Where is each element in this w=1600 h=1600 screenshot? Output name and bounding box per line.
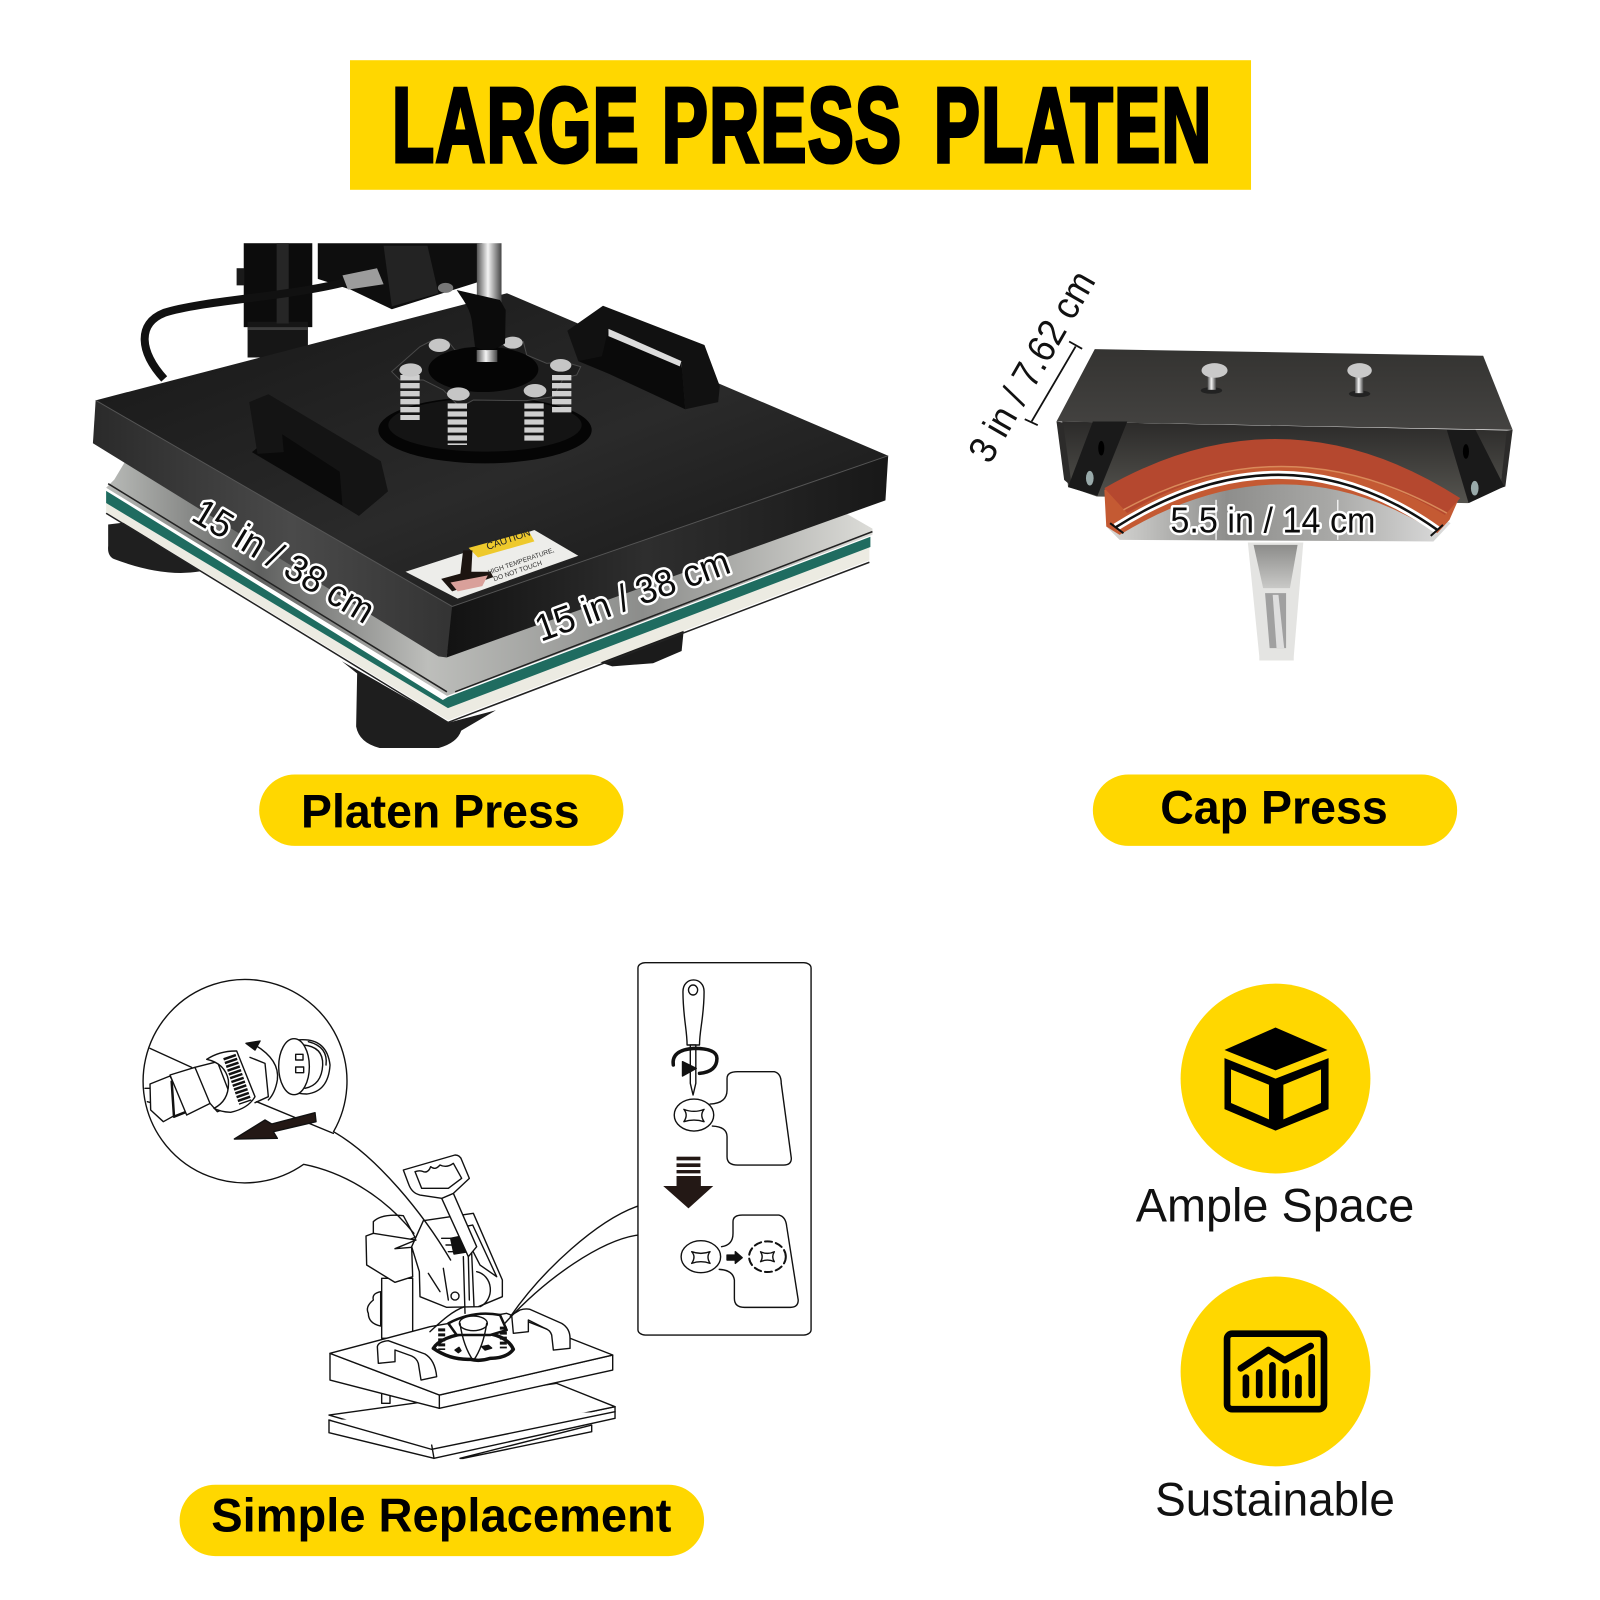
screw detail box (638, 963, 811, 1335)
connector (342, 268, 384, 290)
spring plate assembly (378, 290, 592, 463)
label pill: platen press (259, 774, 623, 846)
top plate (93, 293, 888, 658)
pull direction arrow (234, 1113, 316, 1139)
label pill: cap press (1093, 774, 1457, 846)
upper platen drawing (330, 1313, 613, 1408)
right bracket (1447, 430, 1504, 503)
dimension: platen width: 15 in / 38 cm (529, 540, 735, 649)
panel: platen press photo (93, 243, 888, 748)
press head drawing (366, 1213, 502, 1313)
power cable (145, 281, 348, 379)
spring plate drawing (433, 1314, 513, 1361)
label pill: simple replacement (180, 1485, 704, 1556)
handle shadow (252, 427, 384, 516)
left plate handle drawing (377, 1341, 437, 1380)
right plate handle drawing (512, 1309, 570, 1350)
connector plug drawing (145, 1039, 333, 1133)
icon: box (1181, 984, 1370, 1173)
dimension: cap width: 5.5 in / 14 cm (1170, 501, 1376, 541)
left foot (108, 522, 200, 573)
panel: simple replacement line drawing (143, 963, 811, 1458)
feature: sustainable (1155, 1277, 1395, 1525)
down arrow (663, 1157, 713, 1208)
label warning text: DO NOT TOUCH (493, 560, 543, 583)
label caution text: CAUTION (485, 528, 532, 553)
feature: ample space (1136, 984, 1414, 1231)
dimension: platen depth: 15 in / 38 cm (186, 490, 382, 631)
lower plate with screw removed (681, 1215, 798, 1307)
title banner (350, 60, 1251, 190)
callout lines to screw detail (430, 1206, 638, 1332)
handle drawing (403, 1155, 477, 1257)
label pill: simple replacement: Simple Replacement (211, 1490, 672, 1542)
cap press housing (1057, 349, 1513, 503)
rear foot (597, 631, 684, 666)
callout lines to magnified connector (304, 1132, 451, 1260)
title text: PRESS (662, 66, 902, 184)
left press handle (249, 394, 388, 516)
silicone pad layers (1104, 439, 1460, 535)
curved width dimension (1110, 475, 1443, 536)
height dimension line (1025, 341, 1082, 425)
label pill: cap press: Cap Press (1160, 781, 1388, 833)
sustainable label: Sustainable (1155, 1473, 1395, 1525)
label warning text: HIGH TEMPERATURE, (487, 547, 555, 576)
press screw rod (477, 243, 502, 315)
dimension: cap height: 3 in / 7.62 cm (960, 264, 1104, 470)
title text: PLATEN (934, 66, 1213, 184)
lower platen drawing (329, 1383, 615, 1458)
label pill: platen press: Platen Press (301, 786, 580, 838)
caution label (406, 530, 578, 599)
right press handle (567, 306, 720, 409)
screwdriver (673, 980, 717, 1095)
left bracket (1068, 421, 1127, 496)
cap press stem (1248, 542, 1303, 661)
front foot (342, 661, 496, 748)
title text: LARGE (392, 66, 640, 184)
aluminium lower platen (1106, 477, 1451, 541)
column drawing (367, 1278, 413, 1403)
magnified connector circle (143, 979, 347, 1183)
column and control head (237, 243, 482, 358)
mounting knobs (1201, 363, 1372, 397)
ample space label: Ample Space (1136, 1179, 1414, 1231)
lower platen layers (106, 449, 872, 722)
upper plate with screw (674, 1072, 791, 1165)
panel: cap press photo (960, 264, 1513, 661)
icon: chart (1181, 1277, 1370, 1466)
